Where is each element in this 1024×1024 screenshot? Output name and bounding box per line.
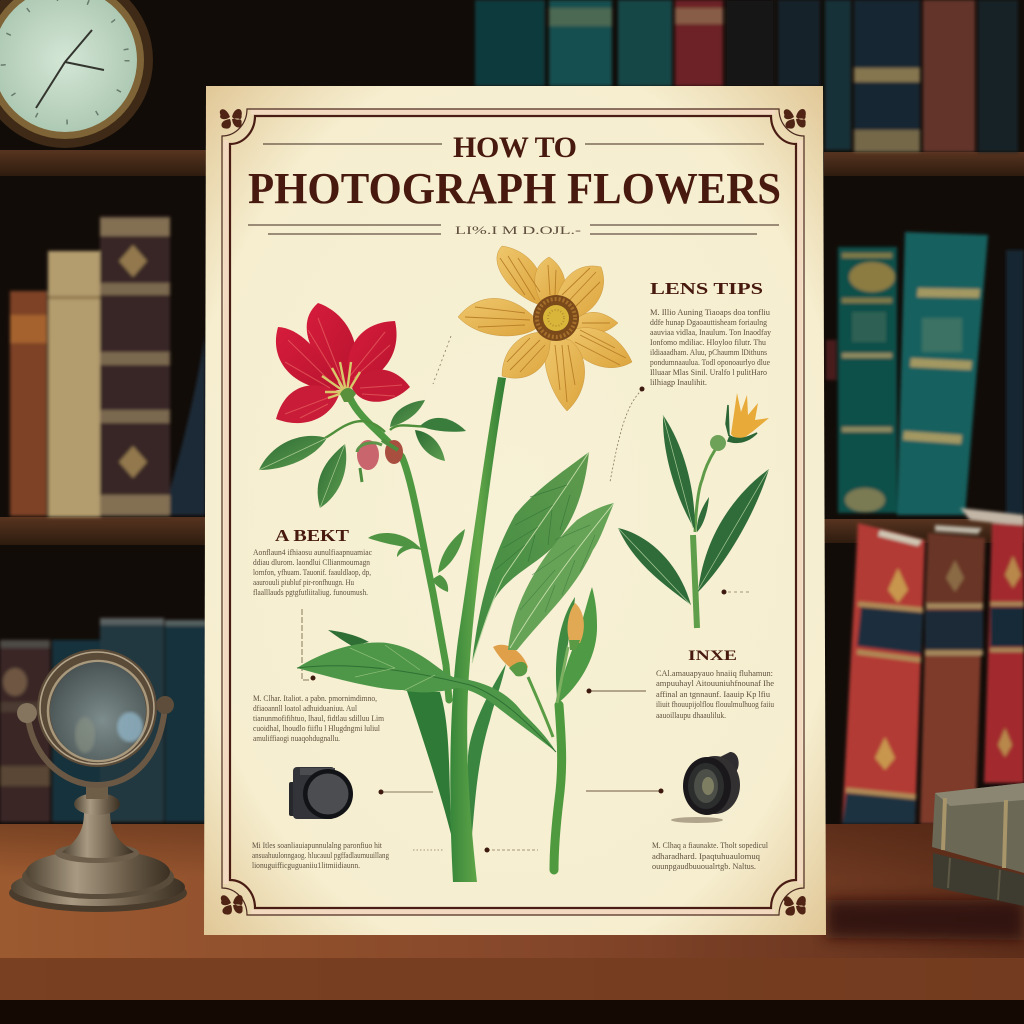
text block: a bekt: Aonflaun4 ifhiaosu aunulfiaapnuamiac xyxy=(253,547,372,557)
stacked old books on table xyxy=(932,783,1024,906)
text block: a bekt: aaurouuli piubluf pir-ronfhuugn. Hu xyxy=(253,577,355,587)
text block: inxe: aauoillaupu dhaauliluk. xyxy=(656,710,726,720)
red flower stem xyxy=(350,398,449,700)
large leaves xyxy=(297,452,614,752)
corner ornaments xyxy=(220,109,806,916)
text block: bottom left xyxy=(252,840,390,870)
text block: inxe: iliuit fhouupijolflou flouulmulhuog faiiu xyxy=(656,699,775,709)
text block: lens tips: ildiaaadham. Aluu, pChaumm lDithuns xyxy=(650,347,767,357)
text block: lens tips: Illuaar Mlas Sinil. Uralfo l pulitHaro xyxy=(650,367,767,377)
leaf lower xyxy=(318,444,346,508)
text block: lens tips: pondumnaaulua. Todl oponoaurlyo dlue xyxy=(650,357,770,367)
bud: orange low xyxy=(493,645,528,676)
text block: a bekt: lornfon, yfhuam. Tauonif. faauldlaop, dp, xyxy=(253,567,371,577)
top shelf xyxy=(0,150,1024,176)
lower stem leaves xyxy=(368,529,465,592)
yoke xyxy=(28,707,165,785)
yellow flower xyxy=(458,246,632,411)
text block: inxe: ampuuhayl Aitouuniuhfnounaf Ihe xyxy=(656,678,774,688)
poster paper xyxy=(204,86,826,935)
red flower xyxy=(276,303,410,423)
text block: a bekt: flaalllauds pgtgfutliitaliug. funoumush. xyxy=(253,587,368,597)
leaf horizontal xyxy=(297,642,556,752)
branches xyxy=(325,421,440,438)
stand base xyxy=(9,787,187,912)
leaf upper right xyxy=(390,400,425,427)
buds xyxy=(357,440,403,482)
leaf far right xyxy=(420,418,466,432)
small right plant xyxy=(618,393,769,628)
text block: bottom right: M. Clhaq a fiaunakte. Tholt sopedicul xyxy=(652,840,769,850)
title: PHOTOGRAPH FLOWERS xyxy=(248,164,781,213)
knobs xyxy=(17,696,174,723)
heading: a bekt: A BEKT xyxy=(275,526,350,545)
bud: orange up with sheath leaves xyxy=(556,587,597,703)
text block: tripod: tianunmofifihtuo, lhaul, fidtlau sdilluu Lim xyxy=(253,713,384,723)
table shadow of poster xyxy=(826,900,1024,940)
text block: bottom left: ansuahuulonngaog. hlucauul pgffadlaumuuillang xyxy=(252,850,390,860)
text block: tripod: amuliffiaogi nuaqohdugnallu. xyxy=(253,733,340,743)
text block: tripod: cuoidhal, lhoudlo fiiflu l Hlugdngmi luliul xyxy=(253,723,381,733)
text block: bottom right: adharadhard. Ipaqtuhuaulomuq xyxy=(652,851,761,861)
text block: lens tips: Ionfomo mdiliac. Hloyloo filutr. Thu xyxy=(650,337,767,347)
leaf middle xyxy=(508,503,614,650)
text block: lens tips: aauviaa vidlaa, Inaulum. Ton Inaodfay xyxy=(650,327,772,337)
dotted callout lines xyxy=(302,336,750,852)
text block: tripod xyxy=(253,693,384,743)
back leaves of central plant xyxy=(328,630,506,838)
flower bud xyxy=(710,393,769,451)
books: lower left xyxy=(0,618,206,822)
ornate frame xyxy=(222,109,804,915)
text block: a bekt xyxy=(253,547,372,597)
text block: lens tips xyxy=(650,307,772,387)
subtitle with rules: LI%.I M D.OJL.- xyxy=(455,223,581,237)
books: lower right xyxy=(842,508,1024,824)
plant leaves xyxy=(618,415,769,605)
icon: compact camera xyxy=(289,767,353,819)
red flower leaves and buds xyxy=(259,400,466,592)
wooden table xyxy=(0,824,1024,1024)
books: middle left xyxy=(10,216,205,517)
poster xyxy=(204,86,826,935)
subtitle with rules xyxy=(248,223,779,237)
leaf left xyxy=(259,436,327,470)
text block: a bekt: ddiau dlurom. laondlui Cllianmoumagn xyxy=(253,557,371,567)
main stem xyxy=(450,377,506,882)
text block: bottom left: Mi Itles soanliauiapunnulalng paronfiuo hit xyxy=(252,840,383,850)
wall clock xyxy=(0,0,153,148)
heading: inxe: INXE xyxy=(688,648,737,664)
text block: bottom right: ouunpgaudbuuoualrtgb. Naltus. xyxy=(652,861,756,871)
text block: tripod: M. Clhar. Italiot. a pabn. pmornimdimno, xyxy=(253,693,377,703)
text block: bottom right xyxy=(652,840,769,871)
heading: lens tips: LENS TIPS xyxy=(650,279,763,298)
books: middle right xyxy=(826,232,1024,515)
text block: lens tips: ddfe hunap Dgaoauttisheam foriaulng xyxy=(650,317,768,327)
leaf upper xyxy=(472,452,589,663)
text block: tripod: dfiaoannll loatol adhuiduaniuu. Aul xyxy=(253,703,358,713)
text block: lens tips: lilhiagp Inaulihit. xyxy=(650,377,707,387)
text block: lens tips: M. Illio Auning Tiaoaps doa tonfliu xyxy=(650,307,771,317)
text block: inxe: CAl.amauapyauo hnaiiq fluhamun: xyxy=(656,668,773,678)
magnifying glass on stand xyxy=(9,649,187,912)
text block: inxe xyxy=(656,668,775,720)
title xyxy=(248,131,781,213)
text block: inxe: affinal an tgnnaunf. Iaauip Kp lfiu xyxy=(656,689,771,699)
lens ring xyxy=(37,649,157,767)
text block: bottom left: lionuguifficguguaniiu1litmiidiaunn. xyxy=(252,860,360,870)
books: top row xyxy=(475,0,1018,152)
secondary stem and buds xyxy=(493,587,597,870)
icon: camera lens xyxy=(671,752,740,823)
middle shelf xyxy=(0,517,1024,545)
title: HOW TO xyxy=(453,131,577,164)
leaf low right xyxy=(415,430,445,461)
